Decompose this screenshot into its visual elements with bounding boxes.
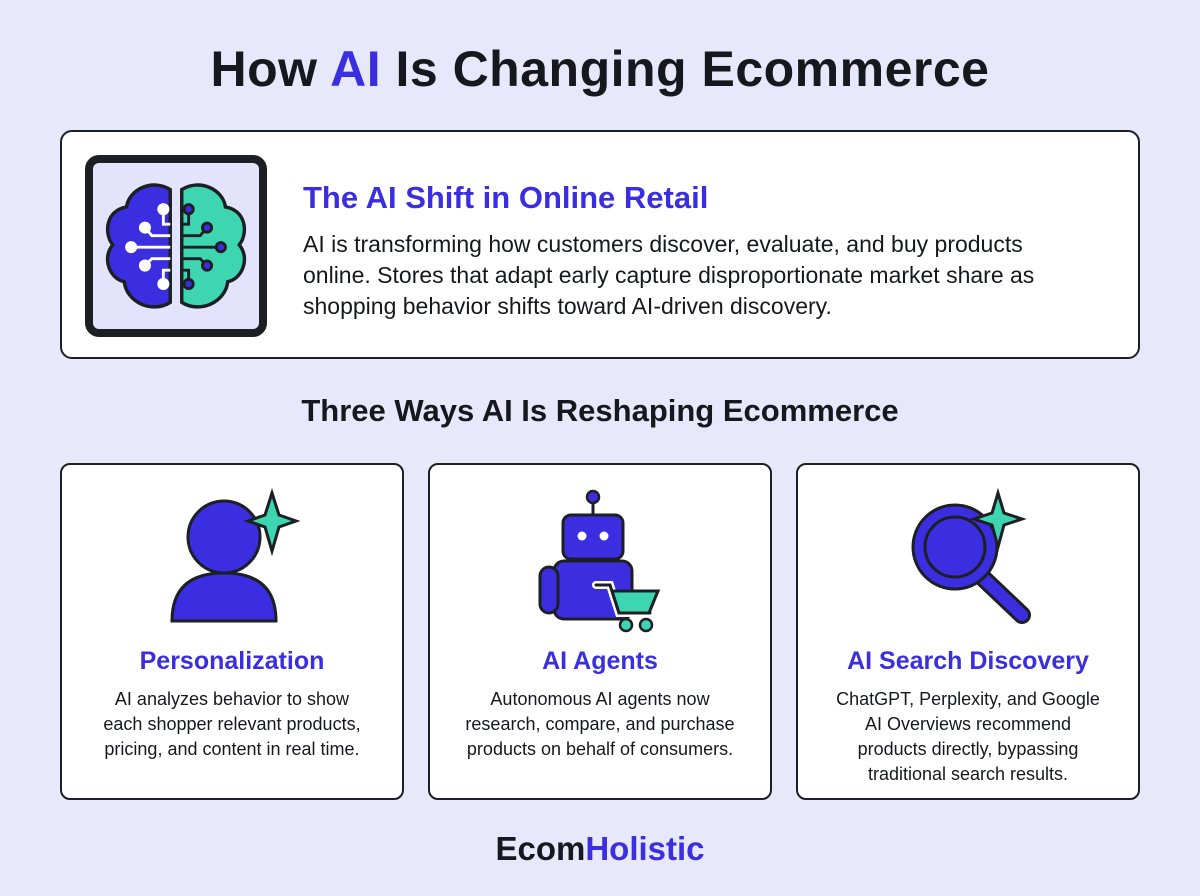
panel heading: The AI Shift in Online Retail: [303, 180, 708, 215]
title: AI Agents: [542, 647, 658, 675]
title: How AI Is Changing Ecommerce: [211, 41, 989, 97]
icon: magnifier sparkle: [912, 488, 1031, 624]
title: AI Search Discovery: [847, 647, 1089, 675]
icon: robot cart: [538, 490, 660, 632]
text: AI analyzes behavior to show each shopper relevant products, pricing, and content in real time.: [103, 689, 361, 759]
section heading: Three Ways AI Is Reshaping Ecommerce: [301, 393, 899, 428]
text: ChatGPT, Perplexity, and Google AI Overviews recommend products directly, bypassing traditional search results.: [836, 689, 1100, 784]
icon: brain: [85, 155, 267, 337]
panel: AI shift: [60, 130, 1140, 359]
text: Autonomous AI agents now research, compare, and purchase products on behalf of consumers.: [465, 689, 735, 759]
footer brand: EcomHolistic: [495, 830, 705, 867]
title: Personalization: [140, 647, 324, 675]
card: AI search: [796, 463, 1140, 800]
icon: person sparkle: [170, 488, 300, 622]
card: AI agents: [428, 463, 772, 800]
panel text: AI is transforming how customers discover, evaluate, and buy products online. Stores that adapt early capture disproportionate market share as shopping behavior shifts toward AI-driven discovery.: [303, 231, 1034, 319]
card: personalization: [60, 463, 404, 800]
